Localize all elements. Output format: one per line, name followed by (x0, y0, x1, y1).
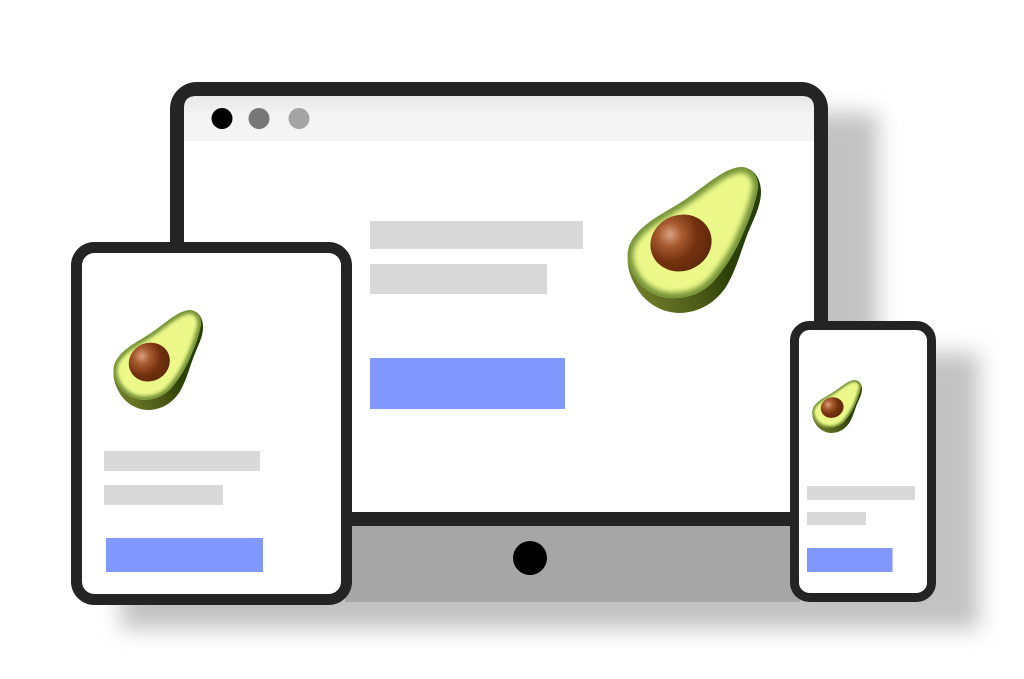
monitor frame and screen (177, 89, 821, 519)
tablet (76, 248, 346, 600)
tablet button (106, 538, 263, 572)
icon: desktop avocado (628, 167, 761, 313)
desktop heading placeholder (370, 221, 583, 249)
tablet subheading placeholder (104, 485, 223, 505)
icon: phone avocado (812, 380, 862, 433)
icon: tablet avocado (113, 310, 203, 410)
window control: light grey dot (288, 108, 310, 129)
phone subheading placeholder (807, 512, 866, 525)
illustration: responsive devices (71, 82, 990, 640)
phone heading placeholder (807, 486, 915, 500)
drop shadows (121, 113, 979, 629)
monitor chin (345, 520, 800, 602)
monitor (177, 89, 821, 602)
tablet heading placeholder (104, 451, 260, 471)
browser title bar (184, 96, 814, 141)
window control: dark grey dot (248, 108, 270, 129)
phone (794, 326, 932, 598)
desktop button (370, 358, 565, 409)
window control: black dot (212, 108, 232, 129)
phone button (807, 548, 892, 572)
desktop subheading placeholder (370, 264, 547, 294)
tablet frame (76, 248, 346, 600)
phone frame (794, 326, 932, 598)
monitor home button (513, 541, 547, 575)
